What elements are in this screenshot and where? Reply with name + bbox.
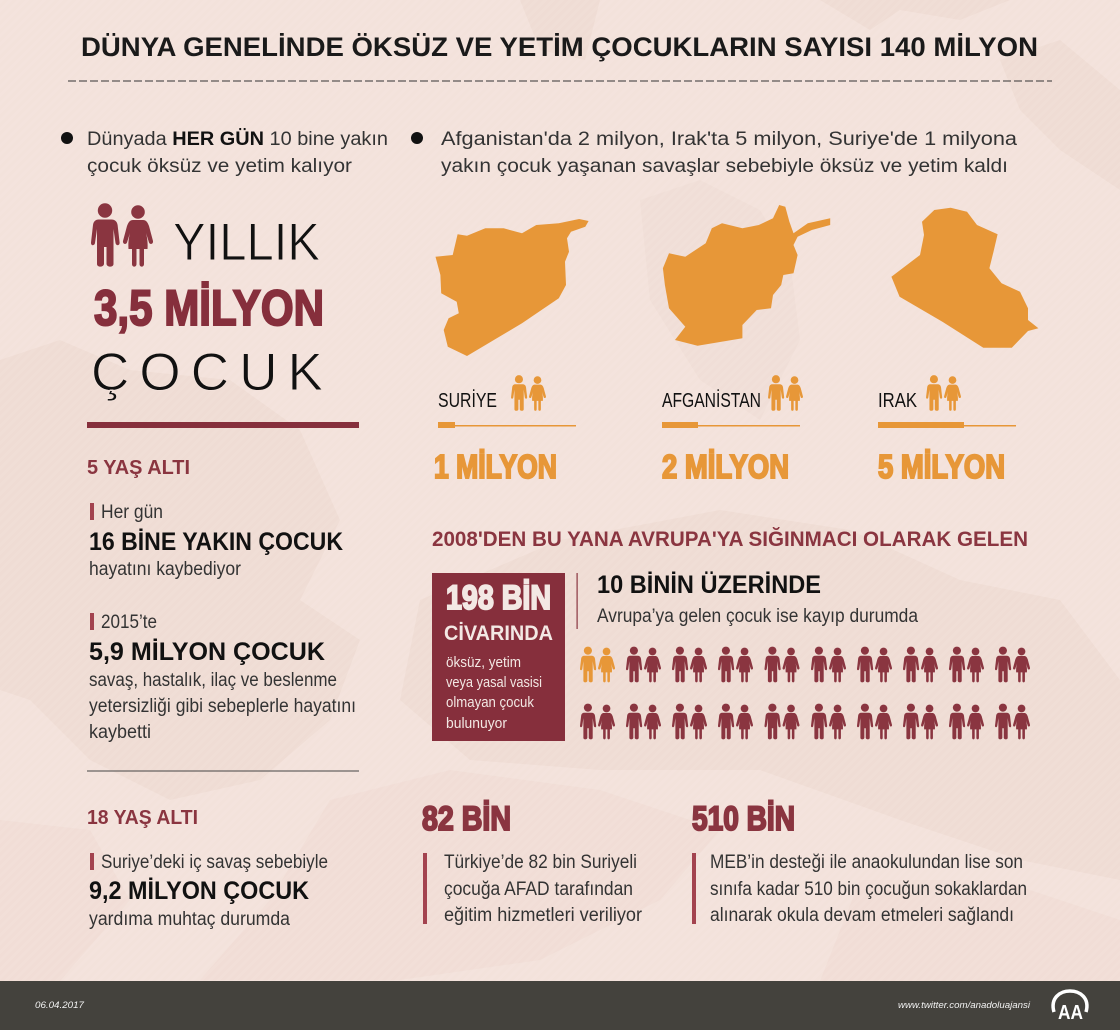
- text: missing children: 10 BİNİN ÜZERİNDE: [597, 570, 821, 599]
- stat: 82 thousand: eğitim hizmetleri veriliyor: [444, 905, 643, 926]
- callout: 198 thousand: bulunuyor: [446, 715, 507, 732]
- section: under five: 5,9 MİLYON ÇOCUK: [89, 638, 325, 666]
- stat: 510 thousand: [692, 800, 1027, 926]
- stat: 510 thousand: alınarak okula devam etmeleri sağlandı: [710, 905, 1014, 926]
- panel: Iraq: 5 MİLYON: [878, 448, 1005, 485]
- annual statistic: [87, 203, 359, 428]
- text: missing children: [576, 570, 918, 629]
- panel: Afghanistan: AFGANİSTAN: [662, 389, 761, 412]
- icon: children: [926, 375, 961, 411]
- section: under five: 16 BİNE YAKIN ÇOCUK: [89, 528, 343, 556]
- intro right: [411, 129, 1017, 177]
- map: Syria: [436, 219, 589, 356]
- callout: 198 thousand: veya yasal vasisi: [446, 674, 542, 691]
- map: Iraq: [891, 208, 1038, 348]
- icon: Anadolu Agency logo: [1053, 991, 1087, 1024]
- section: under eighteen: 9,2 MİLYON ÇOCUK: [89, 877, 309, 905]
- section: under five: 5 YAŞ ALTI: [87, 457, 190, 479]
- intro left: çocuk öksüz ve yetim kalıyor: [87, 156, 353, 177]
- section: under eighteen: [87, 807, 328, 930]
- intro right: Afganistan'da 2 milyon, Irak'ta 5 milyon, Suriye'de 1 milyona: [441, 129, 1017, 150]
- footer: [0, 981, 1120, 1030]
- heading: refugees: 2008'DEN BU YANA AVRUPA'YA SIĞINMACI OLARAK GELEN: [432, 527, 1028, 551]
- panel: Iraq: IRAK: [878, 390, 918, 412]
- stat: 510 thousand: MEB’in desteği ile anaokulundan lise son: [710, 852, 1023, 873]
- panel: Afghanistan: 2 MİLYON: [662, 448, 789, 485]
- annual statistic: 3,5 MİLYON: [94, 280, 324, 336]
- intro left: [61, 129, 388, 177]
- stat: 82 thousand: 82 BİN: [422, 800, 511, 838]
- panel: Syria: SURİYE: [438, 389, 497, 412]
- panel: Afghanistan: [662, 205, 830, 485]
- intro right: yakın çocuk yaşanan savaşlar sebebiyle öksüz ve yetim kaldı: [441, 156, 1008, 177]
- section: under five: [87, 457, 356, 743]
- annual statistic: YILLIK: [173, 213, 320, 272]
- footer: www.twitter.com/anadoluajansi: [898, 1000, 1031, 1011]
- callout: 198 thousand: olmayan çocuk: [446, 694, 534, 711]
- title: DÜNYA GENELİNDE ÖKSÜZ VE YETİM ÇOCUKLARIN SAYISI 140 MİLYON: [81, 32, 1038, 62]
- stat: 82 thousand: Türkiye’de 82 bin Suriyeli: [444, 852, 637, 873]
- pictogram: children rows: [580, 647, 1030, 739]
- stat: 82 thousand: çocuğa AFAD tarafından: [444, 879, 633, 900]
- panel: Iraq: [878, 208, 1038, 485]
- section: under five: hayatını kaybediyor: [89, 559, 242, 580]
- section: under five: savaş, hastalık, ilaç ve beslenme: [89, 670, 337, 691]
- icon: children: [768, 375, 803, 411]
- footer: 06.04.2017: [35, 1000, 85, 1011]
- stat: 82 thousand: [422, 800, 643, 926]
- callout: 198 thousand: öksüz, yetim: [446, 654, 521, 671]
- callout: 198 thousand: [432, 573, 565, 741]
- icon: Anadolu Agency logo: AA: [1058, 1002, 1083, 1024]
- intro left: Dünyada HER GÜN 10 bine yakın: [87, 129, 388, 150]
- callout: 198 thousand: 198 BİN: [446, 579, 551, 617]
- section: under eighteen: 18 YAŞ ALTI: [87, 807, 198, 829]
- section: under five: yetersizliği gibi sebeplerle hayatını: [89, 696, 356, 717]
- section: under eighteen: Suriye’deki iç savaş sebebiyle: [101, 852, 328, 873]
- section: under five: 2015’te: [101, 612, 157, 633]
- stat: 510 thousand: sınıfa kadar 510 bin çocuğun sokaklardan: [710, 879, 1027, 900]
- stat: 510 thousand: 510 BİN: [692, 800, 795, 838]
- panel: Syria: [434, 219, 589, 485]
- map: Afghanistan: [663, 205, 830, 346]
- panel: Syria: 1 MİLYON: [434, 448, 557, 485]
- text: missing children: Avrupa’ya gelen çocuk ise kayıp durumda: [597, 606, 918, 627]
- section: under five: kaybetti: [89, 722, 151, 743]
- annual statistic: ÇOCUK: [91, 343, 323, 402]
- section: under five: Her gün: [101, 502, 163, 523]
- callout: 198 thousand: CİVARINDA: [444, 622, 553, 645]
- icon: children: [511, 375, 546, 411]
- section: under eighteen: yardıma muhtaç durumda: [89, 909, 290, 930]
- icon: children: [91, 203, 153, 267]
